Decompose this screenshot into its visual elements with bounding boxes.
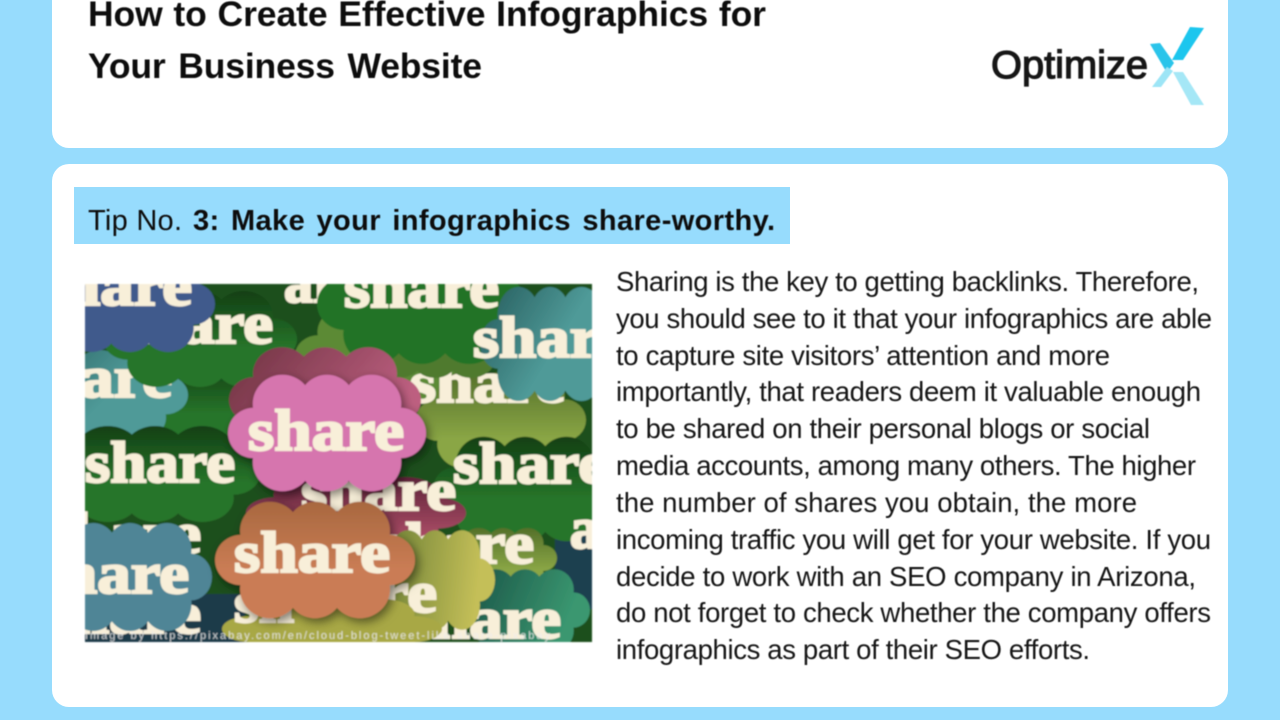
tip heading bar: 3: Make your infographics share-worthy.	[193, 205, 775, 237]
logo: OptimizeX: Optimize	[991, 44, 1148, 87]
body paragraph: to be shared on their personal blogs or social	[616, 413, 1150, 444]
image: share clouds	[84, 282, 594, 644]
content panel: tip 3	[12, 164, 1228, 707]
image: share clouds: share	[344, 255, 499, 320]
image: share clouds: share	[410, 350, 565, 415]
image: share clouds: share	[17, 345, 172, 410]
body paragraph: importantly, that readers deem it valuable enough	[616, 376, 1201, 407]
image: share clouds: share	[46, 501, 201, 566]
image: share clouds: share	[406, 586, 561, 651]
body paragraph: infographics as part of their SEO efforts.	[616, 634, 1090, 665]
logo: OptimizeX	[991, 27, 1204, 105]
body paragraph: media accounts, among many others. The higher	[616, 450, 1196, 481]
body paragraph: you should see to it that your infographics are able	[616, 303, 1212, 334]
image: share clouds: share	[118, 291, 273, 356]
body paragraph: incoming traffic you will get for your website. If you	[616, 524, 1211, 555]
image: share clouds: sh	[234, 570, 294, 635]
image: share clouds: share	[34, 541, 189, 606]
title: Your Business Website	[88, 46, 482, 86]
body paragraph: to capture site visitors’ attention and more	[616, 340, 1110, 371]
image: share clouds: share	[46, 581, 201, 646]
image: share clouds: share	[473, 305, 628, 370]
image: share clouds: share	[85, 430, 235, 495]
body paragraph: do not forget to check whether the company offers	[616, 597, 1211, 628]
image: share clouds: share	[282, 560, 437, 625]
body paragraph	[616, 266, 1212, 665]
image: share clouds: share	[234, 520, 390, 585]
image: share clouds: share	[453, 431, 608, 496]
image: share clouds: a	[570, 496, 599, 561]
body paragraph: decide to work with an SEO company in Arizona,	[616, 561, 1196, 592]
body paragraph: the number of shares you obtain, the more	[616, 487, 1137, 518]
image: share clouds: share	[379, 511, 534, 576]
tip heading bar	[74, 187, 790, 244]
image: share clouds: ar	[284, 250, 339, 315]
image: share clouds: share	[37, 253, 192, 318]
title	[88, 0, 766, 86]
image: share clouds: share	[301, 458, 456, 523]
image credit caption: Image by https://pixabay.com/en/cloud-blog-tweet-like-share-pixabay	[85, 630, 551, 642]
tip heading bar: Tip No.	[88, 205, 182, 237]
image: share clouds: share	[248, 398, 404, 463]
header panel	[52, 0, 1228, 148]
body paragraph: Sharing is the key to getting backlinks. Therefore,	[616, 266, 1199, 297]
